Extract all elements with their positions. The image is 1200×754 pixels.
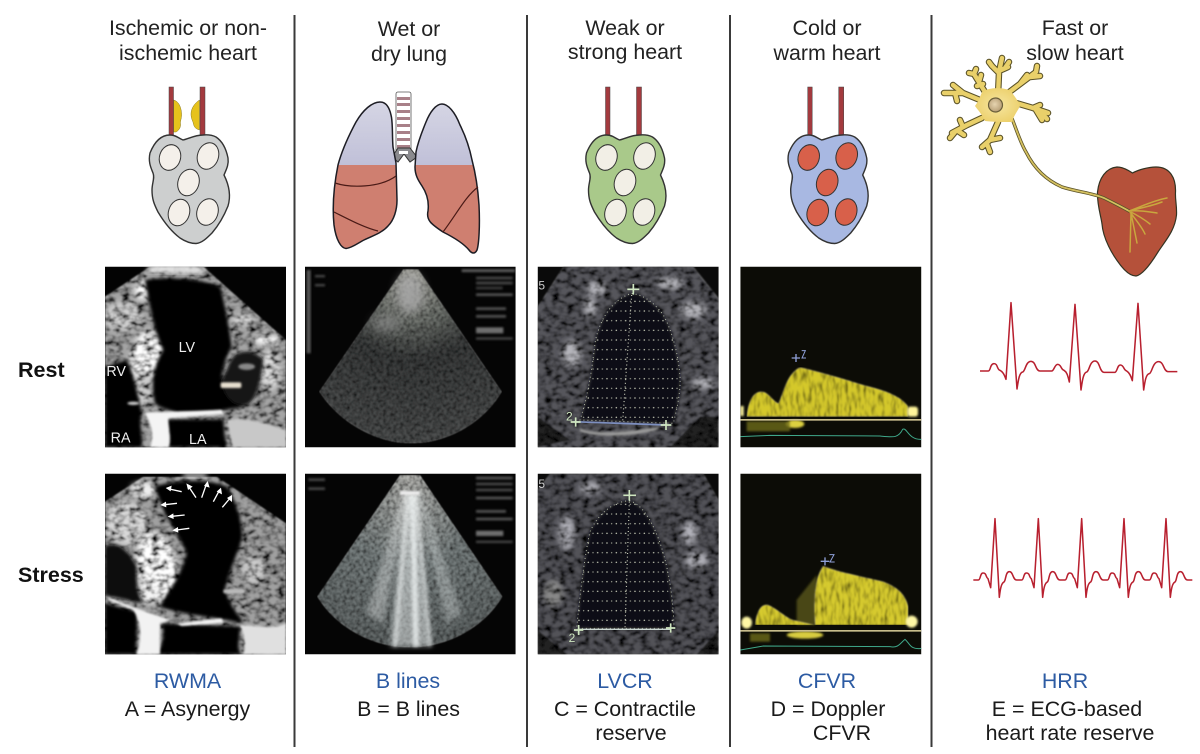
column E: heart rate reserve (944, 16, 1192, 745)
caption C (554, 669, 696, 745)
heading A: ischemic heart (119, 41, 257, 65)
caption B: B = B lines (357, 697, 460, 721)
dot grid (577, 501, 674, 628)
icon: stenosed coronary heart model (149, 87, 229, 244)
row label: Rest: Rest (18, 358, 65, 382)
caption D: CFVR (813, 721, 871, 745)
caption D: CFVR (798, 669, 856, 693)
ECG: stress (973, 519, 1192, 597)
B line streaks (367, 493, 462, 647)
caption E: HRR (1042, 669, 1088, 693)
neuron dendrites and body (944, 58, 1129, 211)
column C: contractile reserve (538, 16, 719, 745)
lung ultrasound: stress with B lines (305, 474, 516, 654)
icon: blue heart model (788, 87, 868, 244)
heading C: strong heart (568, 40, 682, 64)
heading B: Wet or (378, 17, 440, 41)
caption C: C = Contractile (554, 697, 696, 721)
icon: green heart model (586, 87, 666, 244)
heading B: dry lung (371, 42, 447, 66)
echo image: stress volume tracing: 2 (569, 631, 576, 645)
flow envelope (755, 566, 908, 625)
chamber label LV: LV (179, 340, 196, 356)
echo image: stress volume tracing (538, 474, 719, 654)
caption D (771, 669, 885, 745)
axon terminals (1129, 198, 1167, 252)
column A: ischemic heart (105, 16, 286, 721)
chamber label RA: RA (111, 430, 131, 446)
column D: coronary flow (740, 16, 921, 745)
caption C: reserve (595, 721, 667, 745)
gain scale (307, 270, 311, 353)
heading D: warm heart (772, 41, 881, 65)
wall motion arrows (160, 481, 232, 533)
trachea (392, 92, 417, 162)
echo image: rest four-chamber (105, 266, 286, 448)
caption C: LVCR (597, 669, 653, 693)
depth markers (538, 278, 573, 424)
caption E: E = ECG-based (992, 697, 1142, 721)
left lung (333, 102, 397, 248)
depth markers: 5 (538, 278, 545, 292)
right lung (415, 104, 479, 253)
echo image: rest volume tracing (538, 267, 719, 447)
heading C: Weak or (585, 16, 665, 40)
depth markers: 2 (566, 410, 573, 424)
heading D: Cold or (793, 16, 861, 40)
heading A: Ischemic or non- (109, 16, 267, 40)
caption D: D = Doppler (771, 697, 885, 721)
Doppler trace: rest (740, 267, 921, 447)
heading E: Fast or (1042, 16, 1108, 40)
lung ultrasound: rest (305, 267, 516, 447)
caliper crosses (571, 284, 671, 430)
heading E: slow heart (1026, 41, 1124, 65)
machine readouts (315, 269, 515, 340)
caption A: RWMA (154, 669, 222, 693)
echo image: stress volume tracing: 5 (538, 477, 545, 491)
caption E (986, 669, 1154, 745)
flow envelope (747, 367, 908, 417)
dot grid (580, 293, 680, 423)
icon: wet lungs (333, 92, 479, 253)
icon: neuron innervating heart (944, 58, 1177, 276)
caption A: A = Asynergy (125, 697, 251, 721)
caption A (125, 669, 251, 721)
caption B: B lines (376, 669, 440, 693)
ECG: rest (980, 303, 1177, 390)
row label: Stress: Stress (18, 563, 84, 587)
caption E: heart rate reserve (986, 721, 1154, 745)
column B: lungs (305, 17, 516, 721)
Doppler trace: stress (740, 474, 921, 654)
red heart (1097, 167, 1177, 276)
chamber label RV: RV (106, 364, 126, 380)
echo image: stress with asynergy arrows (105, 473, 286, 654)
peak velocity marker (792, 351, 806, 362)
chamber label LA: LA (189, 432, 207, 448)
caption B (357, 669, 460, 721)
column dividers (294, 15, 932, 747)
